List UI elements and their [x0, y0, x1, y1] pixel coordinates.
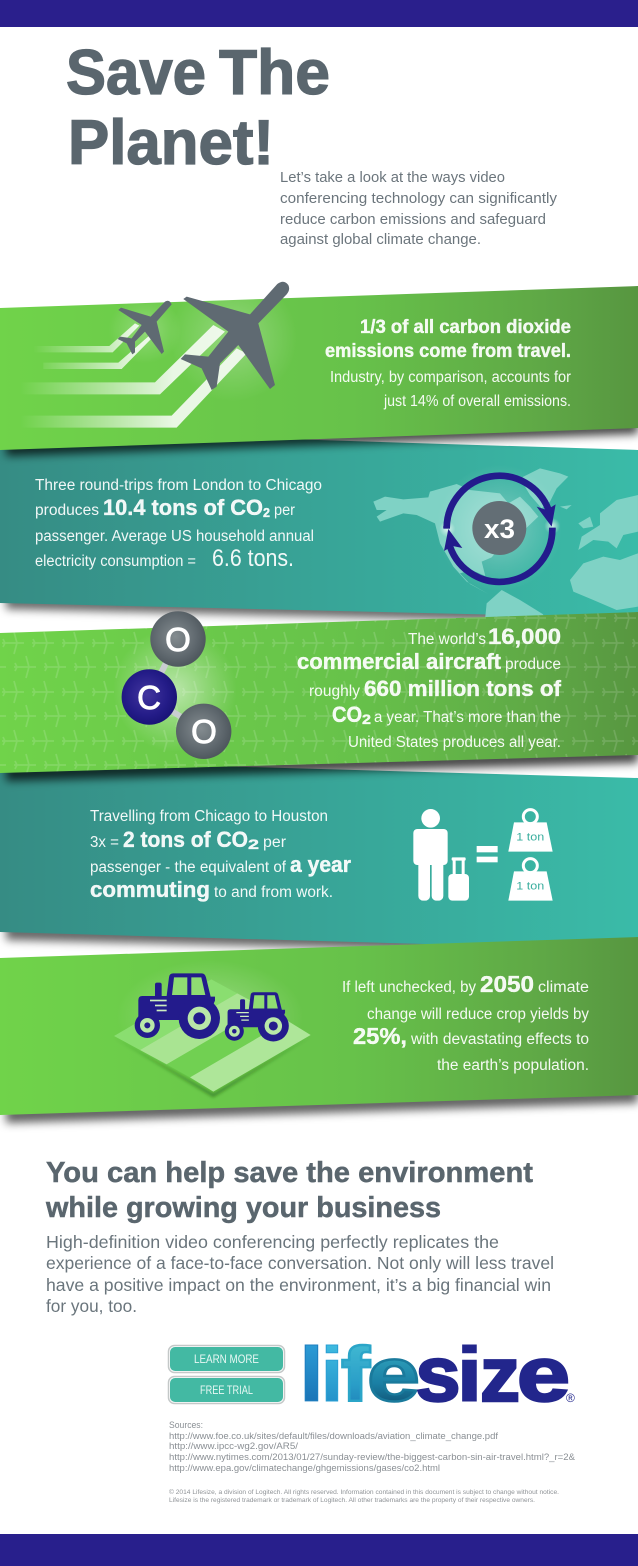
- text: commuting: to and from work.: [214, 884, 333, 901]
- text: travel emissions: just 14% of overall emissions.: [383, 393, 571, 410]
- copyright: [169, 1489, 559, 1504]
- text: commercial aircraft: 2: [362, 711, 371, 727]
- title: The: [219, 38, 330, 108]
- logo: lifesize: e: [517, 1332, 570, 1418]
- bottom bar: [0, 1534, 638, 1566]
- icon: CO2 molecule: C: [137, 679, 161, 716]
- body text: [46, 1232, 554, 1316]
- text: crop yields: climate: [538, 979, 589, 996]
- panel: travel emissions: [0, 275, 638, 456]
- copyright: Lifesize is the registered trademark or trademark of Logitech. All other trademarks are the property of their respective owners.: [169, 1498, 535, 1504]
- heading: help save the environment: while growing your business: [45, 1192, 441, 1224]
- logo: lifesize: i: [456, 1332, 483, 1418]
- text: commuting: a year: [290, 852, 351, 877]
- text: commuting: 2: [248, 836, 259, 852]
- copyright: © 2014 Lifesize, a division of Logitech. All rights reserved. Information contained in this document is subject to change without notice.: [169, 1489, 559, 1496]
- text: commercial aircraft: [297, 624, 562, 751]
- text: round trips: [35, 477, 322, 572]
- sources: [169, 1420, 575, 1473]
- text: commercial aircraft: roughly: [309, 683, 360, 700]
- text: crop yields: If left unchecked, by: [342, 979, 476, 996]
- icon: small tractor: [225, 992, 289, 1041]
- panel: transatlantic round trips: [0, 430, 638, 624]
- text: round trips: 2: [263, 505, 270, 520]
- icon: CO2 molecule: [113, 611, 237, 759]
- button: free trial: [168, 1376, 284, 1404]
- text: crop yields: change will reduce crop yields by: [367, 1006, 589, 1023]
- icon: large tractor: [135, 973, 220, 1039]
- body text: experience of a face-to-face conversation. Not only will less travel: [46, 1253, 554, 1273]
- intro text: [280, 169, 558, 248]
- icon: circular arrows: [443, 476, 556, 582]
- icon: traveller: [413, 809, 469, 901]
- body text: High-definition video conferencing perfectly replicates the: [46, 1232, 499, 1252]
- panel: commercial aircraft: [0, 611, 638, 781]
- icon: world map: [373, 465, 638, 620]
- logo: lifesize: [299, 1332, 575, 1418]
- text: commuting: 2 tons of CO: [123, 827, 248, 852]
- text: commercial aircraft: 660 million tons of: [364, 676, 562, 701]
- text: commercial aircraft: United States produces all year.: [348, 734, 561, 751]
- button: learn more: LEARN MORE: [194, 1352, 259, 1366]
- logo: lifesize: i: [320, 1332, 344, 1418]
- text: crop yields: the earth’s population.: [437, 1057, 589, 1074]
- button: free trial: FREE TRIAL: [200, 1383, 253, 1397]
- logo: lifesize: z: [480, 1332, 520, 1418]
- intro text: conferencing technology can significantly: [280, 190, 558, 207]
- title: Save: [66, 38, 206, 108]
- text: crop yields: 25%,: [353, 1023, 407, 1049]
- icon: CO2 molecule: O: [191, 713, 217, 750]
- field: [114, 979, 311, 1092]
- text: round trips: 10.4 tons of CO: [103, 495, 263, 520]
- text: round trips: Three round-trips from London to Chicago: [35, 477, 322, 494]
- title: [66, 38, 330, 178]
- intro text: against global climate change.: [280, 231, 481, 248]
- text: commercial aircraft: produce: [505, 656, 561, 673]
- icon: weight 1 ton: 1 ton: [516, 881, 544, 893]
- text: round trips: passenger. Average US household annual: [35, 528, 314, 545]
- text: commuting: [90, 808, 351, 902]
- text: commercial aircraft: a year. That’s more than the: [374, 709, 561, 726]
- icon: airplanes with contrails: [0, 275, 297, 428]
- text: commercial aircraft: The world’s: [408, 631, 486, 648]
- text: travel emissions: 1/3 of all carbon dioxide: [360, 317, 571, 338]
- text: commercial aircraft: 16,000: [488, 624, 561, 649]
- text: travel emissions: Industry, by comparison, accounts for: [330, 369, 571, 386]
- text: round trips: produces: [35, 502, 99, 519]
- text: commuting: per: [263, 834, 286, 851]
- button: learn more: [168, 1346, 284, 1372]
- sources: Sources:: [169, 1420, 203, 1430]
- text: travel emissions: [325, 317, 571, 410]
- text: commuting: Travelling from Chicago to Houston: [90, 808, 328, 825]
- intro text: reduce carbon emissions and safeguard: [280, 211, 546, 228]
- intro text: Let’s take a look at the ways video: [280, 169, 505, 186]
- panel: crop yields: [0, 937, 638, 1123]
- panel: commuting equivalent: [0, 760, 638, 955]
- text: round trips: per: [274, 502, 295, 519]
- logo: lifesize: l: [299, 1332, 324, 1418]
- logo: lifesize: s: [416, 1332, 460, 1418]
- icon: tractors on a field: [114, 960, 311, 1097]
- sources: http://www.ipcc-wg2.gov/AR5/: [169, 1441, 299, 1451]
- logo: lifesize: e: [367, 1332, 420, 1418]
- sources: http://www.foe.co.uk/sites/default/files/downloads/aviation_climate_change.pdf: [169, 1431, 499, 1441]
- title: Planet!: [68, 108, 274, 178]
- text: commuting: commuting: [90, 877, 210, 902]
- text: commuting: 3x =: [90, 834, 119, 851]
- text: crop yields: [342, 971, 589, 1074]
- heading: help save the environment: You can help save the environment: [46, 1157, 533, 1189]
- icon: weight 1 ton: 1 ton: [516, 832, 544, 844]
- heading: help save the environment: [45, 1157, 533, 1224]
- icon: x3 badge: [472, 501, 526, 555]
- icon: CO2 molecule: O: [165, 621, 191, 658]
- sources: http://www.epa.gov/climatechange/ghgemissions/gases/co2.html: [169, 1463, 440, 1473]
- top bar: [0, 0, 638, 27]
- icon: equals sign: [477, 846, 498, 862]
- text: commuting: passenger - the equivalent of: [90, 859, 287, 876]
- logo: lifesize: ®: [566, 1391, 575, 1405]
- text: round trips: 6.6 tons.: [212, 545, 294, 572]
- text: travel emissions: emissions come from travel.: [325, 341, 571, 362]
- body text: for you, too.: [46, 1296, 137, 1316]
- logo: lifesize: f: [341, 1332, 370, 1418]
- body text: have a positive impact on the environment, it’s a big financial win: [46, 1275, 551, 1295]
- icon: x3 badge: x3: [484, 514, 515, 544]
- text: crop yields: with devastating effects to: [410, 1031, 589, 1048]
- text: round trips: electricity consumption =: [35, 553, 196, 570]
- text: commercial aircraft: commercial aircraft: [297, 649, 502, 674]
- icon: traveller equals two tons: [413, 809, 553, 901]
- text: crop yields: 2050: [480, 971, 534, 997]
- sources: http://www.nytimes.com/2013/01/27/sunday-review/the-biggest-carbon-sin-air-travel.html?_r=2&: [169, 1452, 575, 1462]
- text: commercial aircraft: CO: [332, 702, 362, 727]
